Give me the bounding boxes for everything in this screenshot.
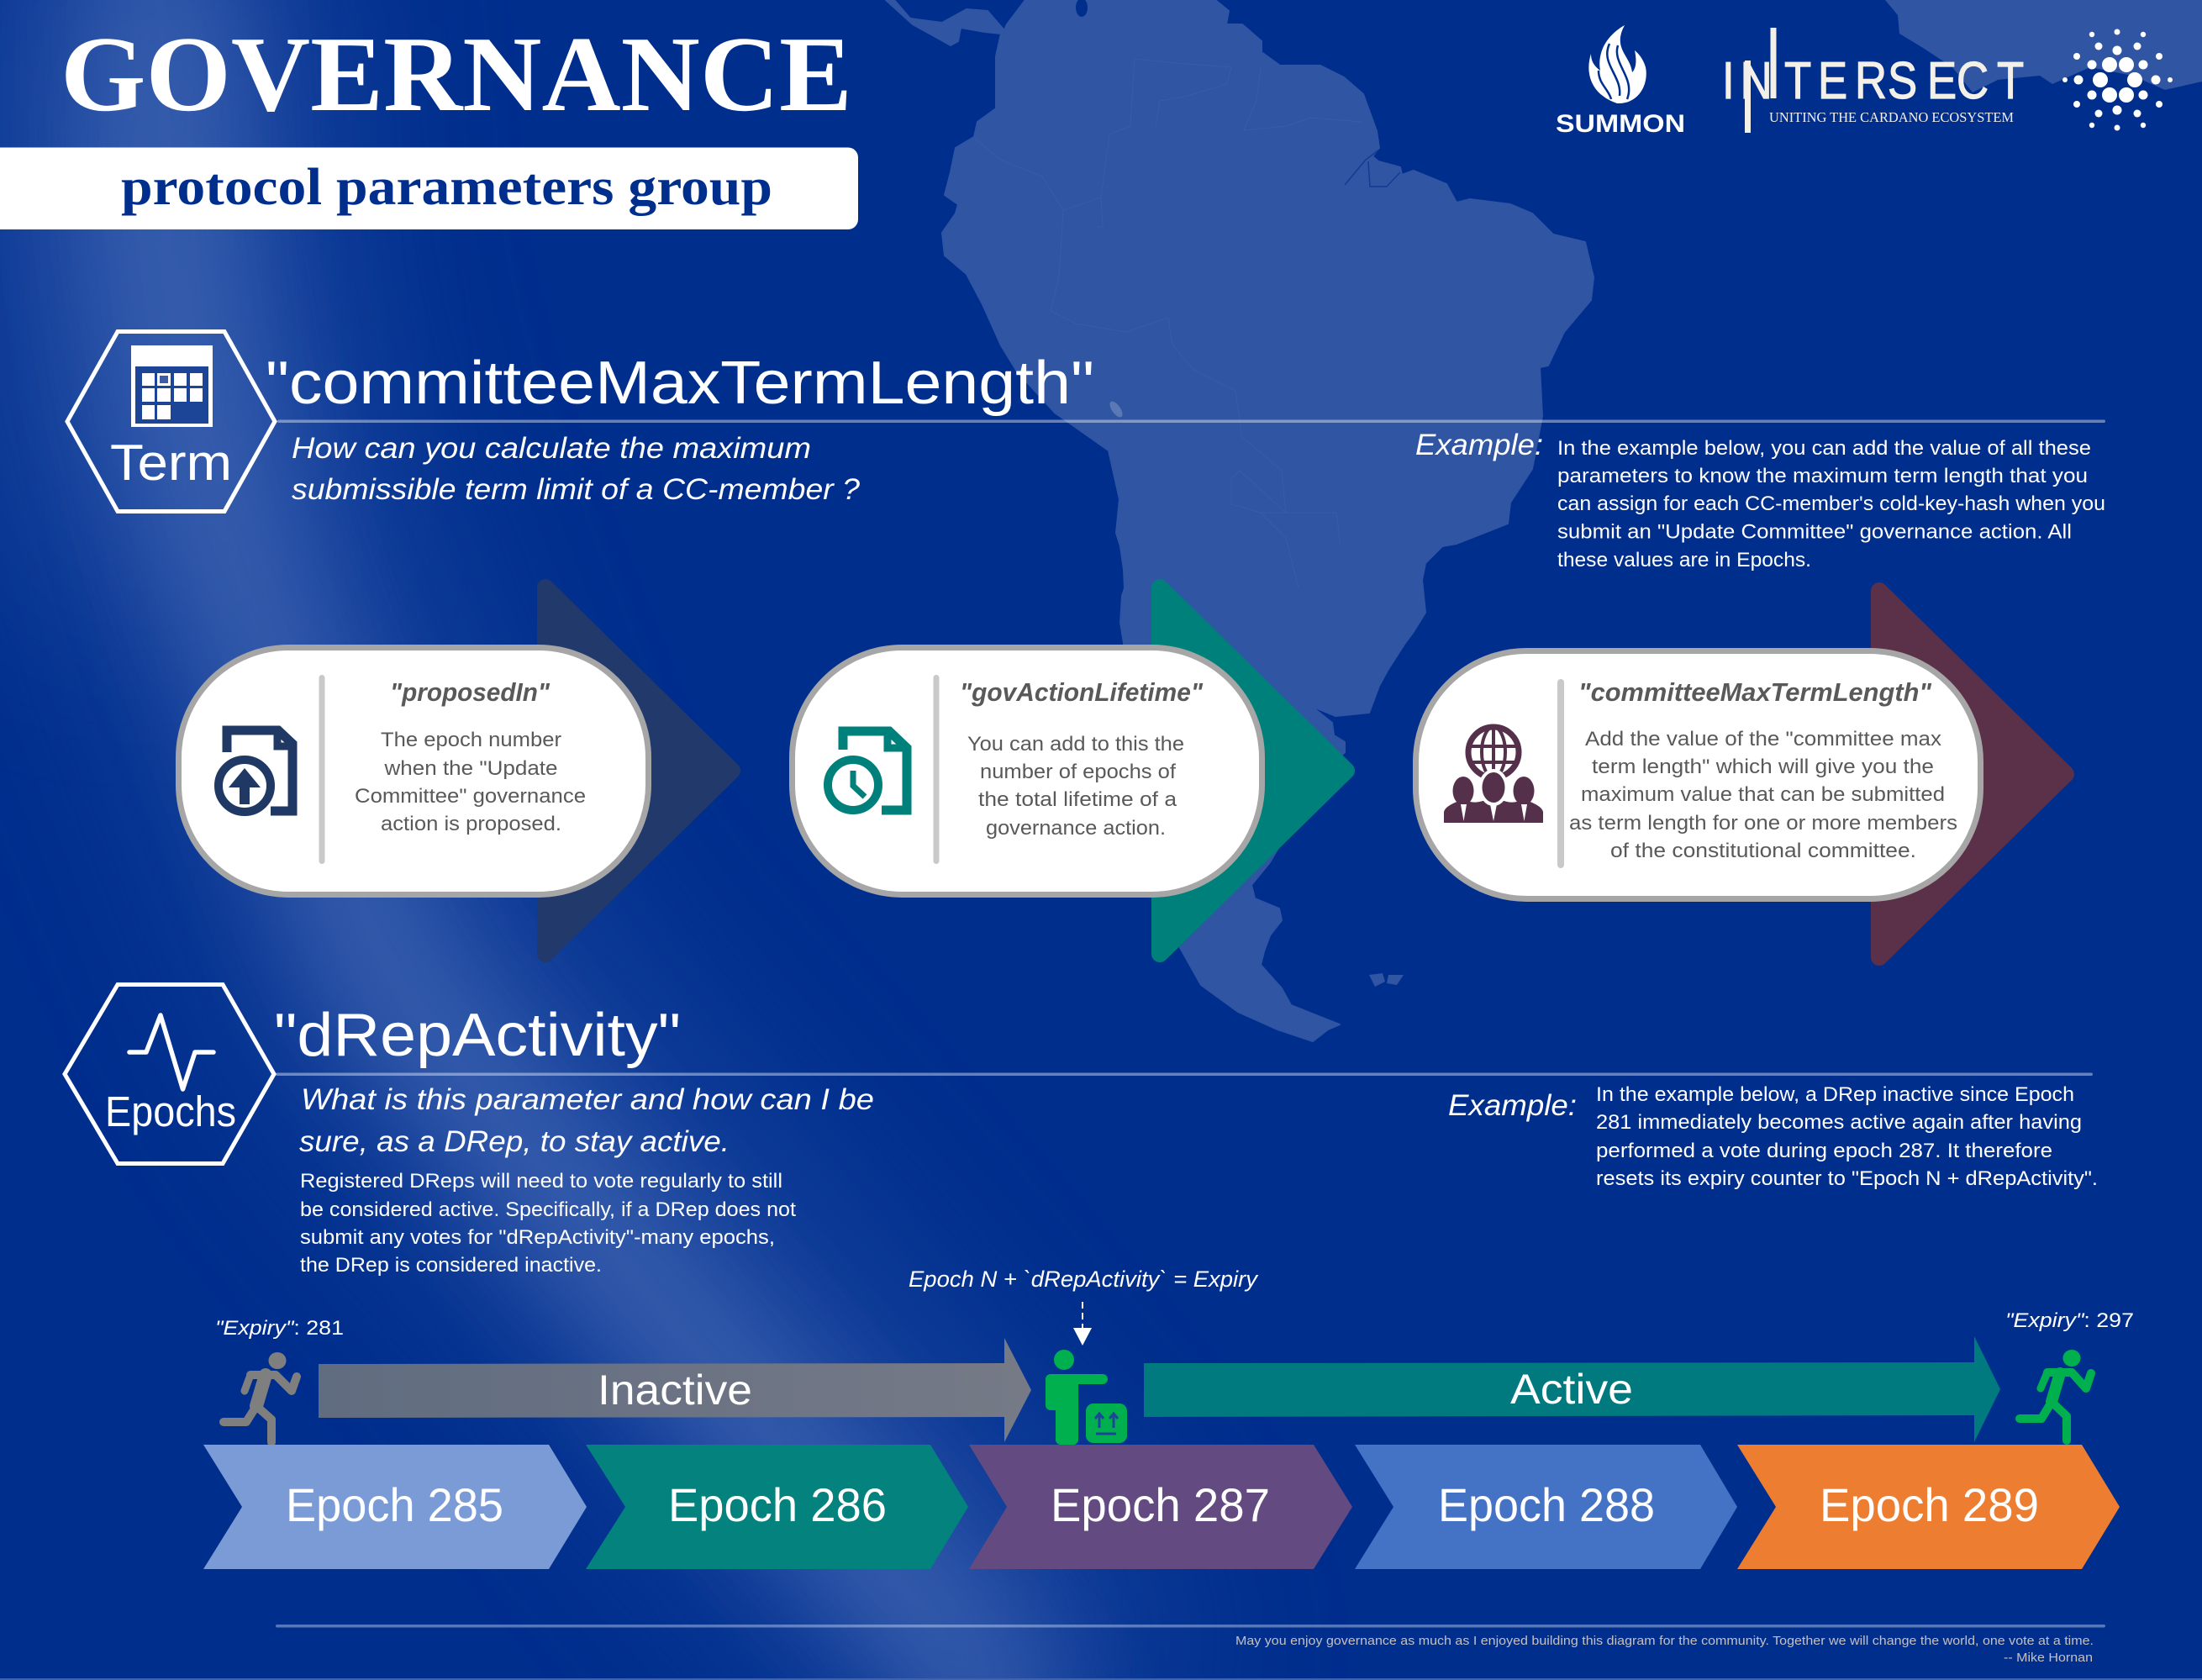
logo: Intersect: INTERSECT [1722, 52, 2024, 110]
icon: document clock [828, 729, 909, 810]
example text 2 [1596, 1083, 2098, 1190]
question text: sure, as a DRep, to stay active. [299, 1125, 730, 1158]
label: expiry 281: "Expiry" : 281 [215, 1317, 344, 1340]
step 1: proposedIn [178, 587, 732, 954]
step 2: govActionLifetime [792, 587, 1346, 954]
capsule [792, 647, 1262, 894]
footer divider [276, 1625, 2105, 1627]
question text: submissible term limit of a CC-member ? [292, 473, 861, 506]
question text: How can you calculate the maximum [292, 432, 811, 465]
arrow [545, 587, 732, 954]
chevron: Epoch 289 [1737, 1445, 2120, 1569]
example text 2: resets its expiry counter to "Epoch N + dRepActivity". [1596, 1167, 2098, 1190]
footer note: -- Mike Hornan [2004, 1651, 2093, 1665]
step 1: proposedIn: "proposedIn" [390, 677, 550, 707]
step 3: committeeMaxTermLength: Add the value of the "committee max [1585, 728, 1941, 750]
label: expiry 297: "Expiry" : 297 [2005, 1309, 2134, 1332]
description text: the DRep is considered inactive. [300, 1254, 602, 1277]
label: expiry formula: Epoch N + `dRepActivity` = Expiry [909, 1267, 1259, 1292]
arrow: active [1144, 1336, 2000, 1442]
example text 1: can assign for each CC-member's cold-key-hash when you [1557, 492, 2105, 515]
arrow: inactive: Inactive [598, 1367, 752, 1414]
question text: What is this parameter and how can I be [301, 1083, 874, 1116]
step 2: govActionLifetime: "govActionLifetime" [960, 677, 1204, 707]
map: South America [886, 0, 1594, 1041]
step 3: committeeMaxTermLength: as term length for one or more members [1569, 812, 1957, 835]
logo: Summon: SUMMON [1556, 110, 1685, 138]
arrow [1879, 591, 2066, 957]
section 1 hexagon badge: Term [67, 331, 275, 511]
icon: green runner [2020, 1350, 2091, 1440]
chevron: Epoch 287 [969, 1445, 1352, 1569]
example text 2: In the example below, a DRep inactive since Epoch [1596, 1083, 2074, 1106]
capsule [178, 647, 649, 894]
chevron: Epoch 288 [1355, 1445, 1737, 1569]
example text 2: performed a vote during epoch 287. It therefore [1596, 1140, 2052, 1162]
title: GOVERNANCE [61, 14, 852, 134]
heading: committeeMaxTermLength: "committeeMaxTermLength" [266, 350, 1094, 417]
step 1: proposedIn: when the "Update [383, 757, 558, 780]
example text 1: these values are in Epochs. [1557, 549, 1811, 571]
step 1: proposedIn: action is proposed. [381, 813, 561, 835]
separator [1557, 679, 1564, 868]
example text 1: In the example below, you can add the value of all these [1557, 437, 2091, 460]
chevron: Epoch 286 [586, 1445, 968, 1569]
step 1: proposedIn: The epoch number [381, 729, 561, 751]
step 2: govActionLifetime: the total lifetime of a [978, 788, 1177, 811]
separator [933, 675, 940, 864]
arrow: inactive [319, 1338, 1031, 1442]
subtitle banner: protocol parameters group [121, 159, 772, 216]
logo: Intersect [1722, 28, 2024, 133]
arrow: active: Active [1510, 1366, 1633, 1413]
step 3: committeeMaxTermLength: "committeeMaxTermLength" [1578, 677, 1932, 707]
chevron: Epoch 289: Epoch 289 [1820, 1478, 2039, 1531]
footer note [1235, 1635, 2094, 1665]
step 2: govActionLifetime: governance action. [986, 817, 1166, 840]
step 2: govActionLifetime: number of epochs of [980, 761, 1176, 783]
divider [277, 420, 2105, 423]
step 1: proposedIn: Committee" governance [355, 785, 586, 808]
step 3: committeeMaxTermLength: maximum value that can be submitted [1581, 783, 1945, 806]
step 3: committeeMaxTermLength [1415, 591, 2066, 957]
subtitle banner [0, 148, 858, 229]
section 1 hexagon badge: Term: Term [110, 434, 232, 491]
footer note: May you enjoy governance as much as I enjoyed building this diagram for the community. Together we will change the world, one vote at a time. [1235, 1635, 2094, 1648]
arrow: dashed down [1073, 1302, 1092, 1346]
example label 1: Example: [1415, 429, 1543, 461]
icon: document upload [219, 728, 294, 812]
separator [319, 675, 324, 864]
example text 1: parameters to know the maximum term length that you [1557, 465, 2088, 487]
example text 1: submit an "Update Committee" governance action. All [1557, 521, 2072, 543]
logo: Intersect: UNITING THE CARDANO ECOSYSTEM [1769, 109, 2014, 125]
logo: Cardano [2062, 29, 2173, 131]
divider [276, 1072, 2093, 1076]
question text [299, 1083, 874, 1158]
icon: green voter with box [1046, 1350, 1127, 1445]
arrow [1160, 587, 1346, 954]
logo: Summon [1556, 25, 1685, 138]
section 2 hexagon badge: Epochs [65, 985, 274, 1163]
example text 2: 281 immediately becomes active again after having [1596, 1111, 2082, 1134]
icon: calendar [131, 345, 213, 427]
icon: grey runner [224, 1352, 297, 1442]
heading: dRepActivity: "dRepActivity" [274, 1002, 681, 1069]
chevron: Epoch 285: Epoch 285 [286, 1478, 503, 1531]
example text 1 [1557, 437, 2105, 571]
step 3: committeeMaxTermLength: of the constitutional committee. [1610, 840, 1916, 862]
chevron: Epoch 288: Epoch 288 [1438, 1478, 1655, 1531]
icon: committee globe [1444, 727, 1543, 823]
step 2: govActionLifetime: You can add to this the [967, 733, 1184, 756]
chevron: Epoch 287: Epoch 287 [1051, 1478, 1270, 1531]
description text: submit any votes for "dRepActivity"-many epochs, [300, 1226, 775, 1249]
icon: pulse [129, 1015, 213, 1089]
description text [300, 1170, 796, 1277]
description text: be considered active. Specifically, if a DRep does not [300, 1198, 796, 1221]
capsule [1415, 650, 1980, 899]
example label 2: Example: [1448, 1089, 1577, 1122]
question text [292, 432, 861, 506]
section 2 hexagon badge: Epochs: Epochs [105, 1088, 236, 1135]
map: Africa [1885, 0, 2202, 92]
description text: Registered DReps will need to vote regularly to still [300, 1170, 782, 1193]
chevron: Epoch 286: Epoch 286 [668, 1478, 887, 1531]
chevron: Epoch 285 [203, 1445, 587, 1569]
step 3: committeeMaxTermLength: term length" which will give you the [1592, 756, 1934, 778]
